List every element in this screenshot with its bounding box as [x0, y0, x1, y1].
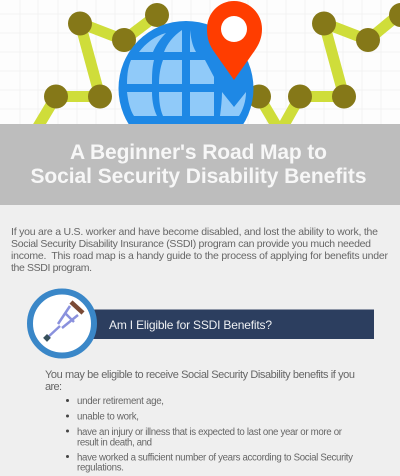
intro text: income. This road map is a handy guide to the process of applying for benefits under [11, 250, 388, 262]
title [30, 141, 366, 188]
intro text [11, 226, 388, 274]
intro text: the SSDI program. [11, 262, 92, 274]
intro text: Social Security Disability Insurance (SSDI) program can provide you much needed [11, 238, 371, 250]
title: Social Security Disability Benefits [30, 165, 366, 188]
bullet list: result in death, and [77, 438, 152, 448]
section heading bar [90, 310, 374, 339]
icon: crutch badge [30, 292, 94, 356]
intro text: If you are a U.S. worker and have become disabled, and lost the ability to work, the [11, 226, 378, 238]
icon: crutch [43, 302, 83, 342]
eligibility text: are: [45, 381, 62, 393]
icon: globe [118, 21, 254, 156]
eligibility text: You may be eligible to receive Social Security Disability benefits if you [45, 369, 355, 381]
road left [36, 3, 169, 130]
bullet list: unable to work, [77, 412, 139, 422]
header illustration [0, 0, 400, 156]
section heading: Am I Eligible for SSDI Benefits? [109, 318, 272, 332]
road right [247, 3, 400, 132]
bullet list: under retirement age, [77, 396, 164, 407]
icon: map pin [207, 1, 262, 80]
bullet list [66, 396, 353, 474]
bullet list: have worked a sufficient number of years according to Social Security [77, 452, 353, 464]
bullet list: regulations. [77, 462, 124, 474]
title: A Beginner's Road Map to [70, 141, 327, 164]
bullet list: have an injury or illness that is expected to last one year or more or [77, 427, 343, 438]
title banner [0, 124, 400, 205]
eligibility text [45, 369, 355, 474]
